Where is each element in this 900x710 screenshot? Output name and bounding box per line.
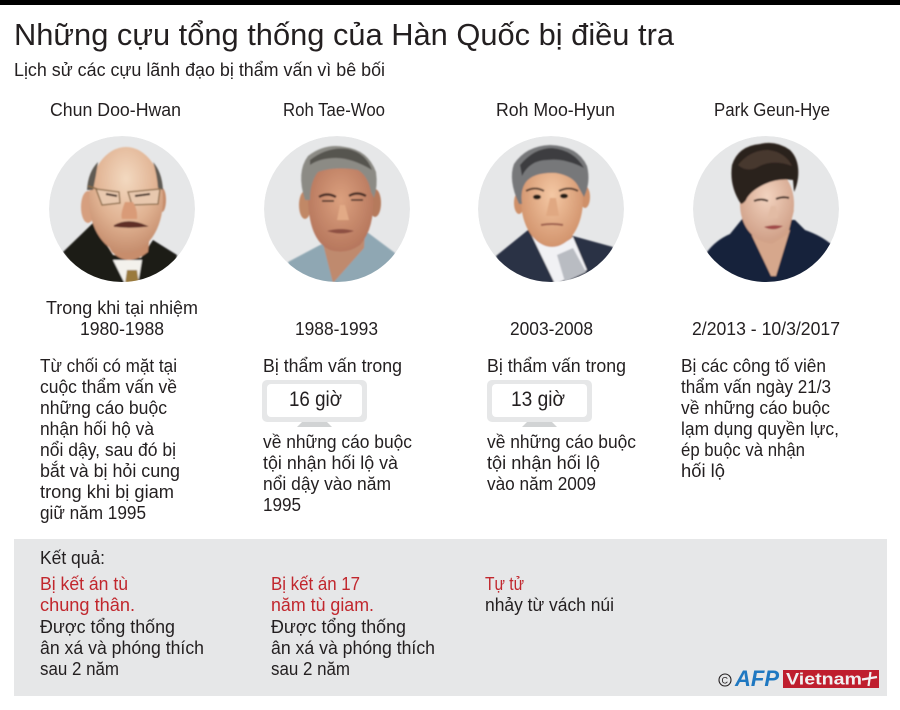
monitor callout: 16 giờ xyxy=(262,380,367,427)
portrait: Roh Moo-Hyun xyxy=(478,136,624,290)
title: Những cựu tổng thống của Hàn Quốc bị điều tra xyxy=(14,17,675,52)
logo: AFP Vietnam+ credit: Vietnam xyxy=(786,670,862,688)
top black bar xyxy=(0,0,900,5)
logo: AFP Vietnam+ credit xyxy=(719,666,879,691)
panel: results xyxy=(14,539,887,696)
name: Roh Moo-Hyun: Roh Moo-Hyun xyxy=(496,99,615,120)
description: Park Geun-Hye xyxy=(681,355,839,481)
description: Roh Tae-Woo xyxy=(263,431,412,515)
description: Chun Doo-Hwan xyxy=(40,355,180,523)
description: Park Geun-Hye: hối lộ xyxy=(681,460,725,481)
description: Park Geun-Hye: lạm dụng quyền lực, xyxy=(681,418,839,439)
description: Chun Doo-Hwan: nhận hối hộ và xyxy=(40,418,155,439)
result: Roh Tae-Woo: Được tổng thống xyxy=(271,616,406,637)
term: Chun Doo-Hwan: 1980-1988 xyxy=(80,318,164,339)
name: Park Geun-Hye: Park Geun-Hye xyxy=(714,99,830,120)
description: Roh Moo-Hyun: vào năm 2009 xyxy=(487,473,596,494)
term: Roh Moo-Hyun: 2003-2008 xyxy=(510,318,593,339)
logo: AFP Vietnam+ credit: C xyxy=(722,676,728,686)
description: Chun Doo-Hwan: giữ năm 1995 xyxy=(40,502,146,523)
portrait: Chun Doo-Hwan xyxy=(49,136,195,290)
description intro: Roh Tae-Woo: Bị thẩm vấn trong xyxy=(263,355,402,376)
description: Chun Doo-Hwan: cuộc thẩm vấn về xyxy=(40,376,177,397)
result: Chun Doo-Hwan: chung thân. xyxy=(40,594,135,615)
description: Park Geun-Hye: Bị các công tố viên xyxy=(681,355,826,376)
name: Roh Tae-Woo: Roh Tae-Woo xyxy=(283,99,385,120)
term: Chun Doo-Hwan xyxy=(46,297,198,339)
term: Roh Tae-Woo: 1988-1993 xyxy=(295,318,378,339)
description: Roh Tae-Woo: tội nhận hối lộ và xyxy=(263,452,399,473)
panel background xyxy=(14,539,887,696)
description: Park Geun-Hye: về những cáo buộc xyxy=(681,397,830,418)
description: Chun Doo-Hwan: những cáo buộc xyxy=(40,397,167,418)
description: Roh Tae-Woo: về những cáo buộc xyxy=(263,431,412,452)
name: Chun Doo-Hwan: Chun Doo-Hwan xyxy=(50,99,181,120)
portrait: Park Geun-Hye xyxy=(693,136,839,290)
result: Chun Doo-Hwan xyxy=(40,573,204,679)
result: Roh Tae-Woo: sau 2 năm xyxy=(271,658,350,679)
result: Chun Doo-Hwan: Được tổng thống xyxy=(40,616,175,637)
monitor callout: 13 giờ xyxy=(487,380,592,427)
portrait: Roh Tae-Woo xyxy=(264,136,410,290)
description: Park Geun-Hye: thẩm vấn ngày 21/3 xyxy=(681,376,831,397)
term: Park Geun-Hye: 2/2013 - 10/3/2017 xyxy=(692,318,840,339)
logo: AFP Vietnam+ credit: AFP xyxy=(734,666,779,691)
heading: results: Kết quả: xyxy=(40,547,105,568)
result: Roh Tae-Woo: ân xá và phóng thích xyxy=(271,637,435,658)
result: Chun Doo-Hwan: Bị kết án tù xyxy=(40,573,128,594)
description: Park Geun-Hye: ép buộc và nhận xyxy=(681,439,805,460)
description: Chun Doo-Hwan: bắt và bị hỏi cung xyxy=(40,460,180,481)
result: Chun Doo-Hwan: sau 2 năm xyxy=(40,658,119,679)
description: Roh Tae-Woo: 1995 xyxy=(263,494,301,515)
description: Roh Moo-Hyun: về những cáo buộc xyxy=(487,431,636,452)
result: Chun Doo-Hwan: ân xá và phóng thích xyxy=(40,637,204,658)
description intro: Roh Moo-Hyun: Bị thẩm vấn trong xyxy=(487,355,626,376)
result: Roh Moo-Hyun: Tự tử xyxy=(485,573,524,594)
result: Roh Moo-Hyun xyxy=(485,573,614,615)
result: Roh Moo-Hyun: nhảy từ vách núi xyxy=(485,594,614,615)
column: Roh Moo-Hyun xyxy=(478,99,636,494)
description: Chun Doo-Hwan: trong khi bị giam xyxy=(40,481,174,502)
monitor callout: 16 giờ: 16 giờ xyxy=(289,388,342,411)
column: Roh Tae-Woo xyxy=(262,99,412,515)
result: Roh Tae-Woo xyxy=(271,573,435,679)
term: Chun Doo-Hwan: Trong khi tại nhiệm xyxy=(46,297,198,318)
result: Roh Tae-Woo: năm tù giam. xyxy=(271,594,374,615)
column: Park Geun-Hye xyxy=(681,99,840,481)
result: Roh Tae-Woo: Bị kết án 17 xyxy=(271,573,360,594)
description: Roh Tae-Woo: nổi dậy vào năm xyxy=(263,473,391,494)
monitor callout: 13 giờ: 13 giờ xyxy=(511,388,565,411)
description: Roh Moo-Hyun: tội nhận hối lộ xyxy=(487,452,600,473)
subtitle: Lịch sử các cựu lãnh đạo bị thẩm vấn vì bê bối xyxy=(14,59,385,80)
column: Chun Doo-Hwan xyxy=(40,99,198,523)
description: Roh Moo-Hyun xyxy=(487,431,636,494)
description: Chun Doo-Hwan: Từ chối có mặt tại xyxy=(40,355,177,376)
description: Chun Doo-Hwan: nổi dậy, sau đó bị xyxy=(40,439,176,460)
